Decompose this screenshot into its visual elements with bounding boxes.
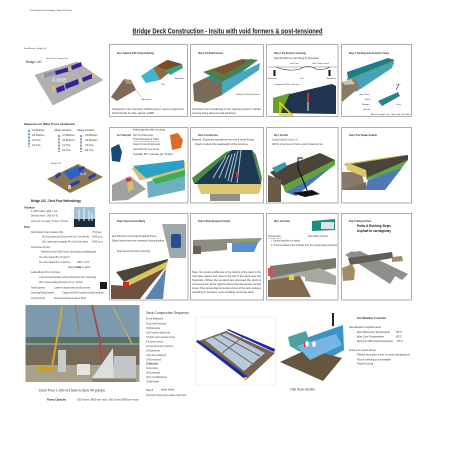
- panel: deck construction sequence: 12) Push on stressing strand: [146, 358, 161, 362]
- panel: sequence for walls pours: C2 Top: [32, 138, 41, 142]
- panel: deck construction sequence: 4) Inst soffit Formwork: [146, 322, 166, 326]
- panel: deck construction sequence: 17) Strike Falsework: [146, 380, 159, 384]
- panel: hot weather concrete: Placed via a pipe in line to control temperature: [357, 352, 410, 356]
- panel: step 2: concrete during placement and hardening.: [192, 112, 236, 115]
- panel: step 2: Step 2. Fix Reinforcement: [198, 52, 223, 55]
- panel: methodology text: Secondary: [68, 265, 82, 269]
- panel: step 4: Cone: [396, 104, 402, 106]
- panel: step 5: Step 5. Fit Bearing Sheet: [117, 134, 131, 137]
- panel: methodology text: 180 m 3/ h: [77, 260, 90, 264]
- caption: pump capacity: [47, 398, 139, 402]
- panel: step 12: Paths & Rubbing Strips: [357, 224, 391, 228]
- panel: deck construction sequence: [146, 311, 189, 397]
- panel: deck construction sequence: 6) Inst Formwork for Cantilever Slab: [146, 330, 170, 334]
- panel: methodology text: 1.200 total = 400 + A1: [31, 209, 58, 213]
- panel: sequence for walls pours: [24, 122, 98, 152]
- panel: methodology text: Other 4 crew cut crashing zone area in 3.2 m 1 - 2.5 hours: [39, 280, 83, 284]
- panel: sequence for walls pours: C4 Top: [62, 143, 71, 147]
- panel: step 9: [110, 214, 188, 300]
- panel: hot weather concrete: Pour in evening or low weather: [357, 358, 391, 362]
- panel: step 9: jack 300 tonne multi-strand hydraulic Pump.: [111, 235, 157, 238]
- panel: step 7: 400 m3 of concrete in 8 hours, pump 8 loads an hour: [272, 143, 323, 146]
- panel: hot weather concrete: Maximum differential temperature: [357, 339, 393, 343]
- panel: methodology text: Volume (m3) / hour (rate) = 3.5 hours = 5 hr slots: [31, 219, 68, 223]
- panel: deck construction sequence: 8) Fix ducts for stressing: [146, 340, 163, 344]
- panel: hot weather concrete: 30°C: [396, 330, 402, 334]
- panel: step 8: [342, 128, 412, 203]
- panel: sequence for walls pours: Sequence for Walls Pours Abutments: [24, 122, 75, 126]
- panel: methodology text: 9:00 a.m.: [92, 234, 103, 238]
- caption: deck pour: Deck Pour 1,400 m3 5am to 9pm 4# pumps: [39, 388, 105, 392]
- panel: deck construction sequence: 10) Install formers: [146, 348, 160, 352]
- panel: step 10: Step 10. Bridge Parapets & Footpath: [198, 220, 230, 223]
- panel: step 4: [342, 44, 412, 116]
- panel: step 5: Typically 55 m strands per Tendon: [133, 153, 174, 156]
- panel: step 5: [110, 128, 188, 203]
- panel: step 1: [110, 44, 188, 116]
- panel: methodology text: Supply 48 m 3 in 24 hours: [39, 270, 60, 274]
- panel: step 12: Asphalt to carriageway: [357, 229, 391, 233]
- panel: methodology text: 1No 2 boom pump capacity 40 m 3 per hour crane: [42, 240, 88, 244]
- panel: sequence for walls pours: Adapt shutters: [54, 128, 72, 132]
- panel: step 11: Step 11. Grout Tendons: [274, 220, 290, 223]
- panel: sequence for walls pours: A2 Top: [32, 143, 41, 147]
- caption: trial deck section: Trial Deck Section: [290, 388, 315, 392]
- panel: step 7: Concrete a deck 32 m boom x 3 A: [272, 138, 298, 142]
- panel: step 11: Grouting provides :-: [268, 234, 282, 238]
- panel: step 11: 1. Corrosion protection to the strands: [271, 240, 301, 242]
- panel: methodology text: One 4 boom capacity 80 m 3 to start hour: [39, 260, 70, 264]
- panel: sequence for walls pours: C4 Bottom: [62, 133, 75, 137]
- panel: step 6: [190, 128, 264, 203]
- panel: step 3: Longitudinal Deck Section: [274, 83, 300, 86]
- panel: deck construction sequence: 3) Inst Falsework: [146, 316, 164, 320]
- panel: deck construction sequence: Day 8: [146, 388, 154, 392]
- panel: bridge 14C overview diagram: A BBB: [52, 78, 67, 84]
- panel: step 9: Strand extensions are measured during loading: [112, 240, 165, 242]
- panel: methodology text: Secure any hand-site or spray at 400 ml: [54, 296, 86, 300]
- panel: step 4: Duct: [396, 83, 401, 86]
- panel: deck construction sequence: Deck Construction Sequence: [146, 311, 189, 315]
- panel: sequence for walls pours: A2 Bottom: [32, 133, 45, 137]
- panel: step 4: Wedges: [362, 104, 370, 106]
- photo: concrete pumps on site: [26, 305, 140, 382]
- panel: methodology text: 1 Quality control Team 2 supervision, all quality testing team: [62, 290, 104, 294]
- panel: methodology text: Concrete Pump:: [31, 245, 51, 249]
- panel: hot weather concrete: Max Placement Temperature: [357, 330, 390, 334]
- panel: methodology text: Labour:: [31, 270, 40, 274]
- panel: step 3: Abutment: [327, 77, 336, 80]
- panel: step 1: formwork to the deck soffit: [112, 112, 155, 115]
- panel: trial deck section illustration: [280, 313, 344, 381]
- caption: pump capacity: Pump Capacity: [47, 398, 66, 402]
- panel: step 6: Material : Expanded polystyrene formers & metal fixings: [192, 138, 255, 142]
- panel: step 4: Strands: [363, 108, 370, 111]
- panel: step 8: Step 8. Pour Parapet Upstands: [349, 134, 378, 137]
- panel: methodology text: 1No 4 boom placing unit (32 m pump with 45 m) 7 hour shift wide: [42, 234, 89, 238]
- panel: deck construction sequence: 14) Grout tendons: [146, 366, 158, 370]
- panel: methodology text: [24, 206, 104, 300]
- panel: deck construction sequence: 11) Pour deck to underside slab: [146, 353, 166, 357]
- panel: bridge 14C overview diagram: Road Name - Bridge 14C: [24, 47, 47, 50]
- panel: hot weather concrete: Specification requirements: [349, 325, 382, 329]
- panel: step 10: Note: the tendon profile lies in the bottom of the deck in the: [192, 271, 262, 274]
- panel: step 1: Falsework in the temporary scaffold system used to support the: [112, 108, 185, 111]
- panel: step 9: Span camber lift during stressing: [117, 250, 151, 253]
- header note: 1 Outline Bridge Deck Methodology - Bridge 14C Example: [29, 9, 73, 12]
- panel: methodology text: Pour: [24, 225, 30, 229]
- panel: step 3: Duct Profile curved: [312, 62, 329, 65]
- panel: step 10: mid-span region and rises to the top of the deck over the: [192, 275, 262, 278]
- panel: step 10: Supports. When the tendons are stressed the deck is: [192, 279, 262, 282]
- panel: step 5: Step 5. Pour & Bearing Sheet: [133, 134, 153, 137]
- panel: step 3: Step 3. Fix Ducts for stressing: [274, 52, 307, 55]
- panel: sequence for walls pours: A4 Top: [62, 148, 71, 152]
- panel: step 3: Void Tube: [290, 63, 300, 65]
- panel: sequence for walls pours: C6 Top: [85, 143, 94, 147]
- panel: deck construction sequence: Grout Inlet, Deck pumps, parapet, Seal, Deck: [146, 393, 186, 397]
- panel: deck plan illustration: [196, 317, 276, 385]
- panel: methodology text: 60 in work: [78, 265, 91, 269]
- panel: methodology text: Volumes: [24, 206, 36, 210]
- panel: step 2: Formwork ties bracketing to the casting used for curtain: [192, 108, 262, 111]
- panel: sequence for walls pours: A6 Top: [85, 148, 94, 152]
- panel: step 9: Step 9. Stress and Grout Sliding: [117, 220, 145, 223]
- panel: step 7: [266, 128, 338, 203]
- panel: step 12: [342, 214, 412, 300]
- panel: bridge 14C overview diagram: Deck Pour Sequence: [46, 57, 69, 60]
- panel: methodology text: 9:00 a.m.: [92, 240, 103, 244]
- panel: sequence for walls pours: C2 Bottom: [32, 128, 45, 132]
- panel: deck construction sequence: 15) Pour parapet walls: [146, 370, 160, 374]
- photo: tower crane small: [74, 207, 95, 227]
- panel: hot weather concrete: Actions to ensure above: [349, 348, 376, 352]
- panel: step 7: Step 7. Pour Deck: [274, 134, 289, 137]
- panel: step 10: compressed in those regions where the load causes tensile: [192, 283, 262, 286]
- panel: hot weather concrete: Hot Weather Concrete: [357, 316, 386, 320]
- panel: step 10: cracking to produce more durable concrete deck: [192, 291, 255, 294]
- panel: hot weather concrete: Max Core Temperature: [357, 334, 384, 338]
- panel: deck construction sequence: 13) Stress deck: [146, 362, 158, 366]
- panel: step 11: 2. A bond between the strands and the surrounding concrete: [271, 244, 338, 247]
- panel: step 6: Used to reduce the deadweight of the structure: [195, 143, 249, 146]
- panel: methodology text: Formwork Supervisor: [31, 286, 45, 290]
- panel: bridge 14C overview diagram: [24, 47, 103, 105]
- panel: bridge 14C overview diagram: Bridge 14C: [26, 60, 43, 64]
- panel: deck construction sequence: 5) Fit Bridge bearings: [146, 326, 160, 330]
- panel: sequence for walls pours: C6 Bottom: [85, 133, 98, 137]
- panel: deck construction sequence: Winter Works: [161, 388, 175, 392]
- panel: deck construction sequence: 16) Pour curved Walkway Panels: [146, 375, 167, 379]
- panel: methodology text: Working Pattern (2 day consistently 18m): [31, 230, 63, 234]
- panel: abutment site diagram: Bridge 14C: [51, 162, 62, 165]
- panel: methodology text: Placement by 4 boom 180 m3 hourly - all-over placing pre-hydrating gate: [41, 250, 96, 254]
- panel: step 6: Step 6. Fix void formers: [198, 134, 219, 137]
- panel: step 1: Step 1. Falsework, Soffit Formwork & Bearings: [117, 52, 155, 55]
- panel: methodology text: 1 crane work crew ambulating concrete at Substructure point - start working: [39, 275, 96, 279]
- panel: step 5: Speed 40 to 60 m per minute: [133, 148, 160, 151]
- panel: step 5: Strand 15.2 mm dia high tensile: [133, 143, 161, 146]
- caption: pump capacity: 160 hours 5800 per hour 160 hours 8800 per hour: [77, 398, 139, 402]
- panel: methodology text: Deck slab Volume : 1,400 m3 = 3d: [31, 214, 58, 218]
- heading: deck pour methodology: Bridge 14C - Deck Pour Methodology: [31, 199, 81, 203]
- panel: step 5: Methodology deco-after-Concreting: [133, 128, 165, 132]
- panel: step 3: Specified 80 mm dia tubing fit and space: [274, 57, 320, 60]
- panel: hot weather concrete: Proper Curing: [357, 362, 373, 366]
- panel: deck construction sequence: 9) Fix stop-ends and anchor for stressing: [146, 344, 173, 348]
- panel: step 1: Abutment: [142, 98, 152, 101]
- panel: step 1: Pier: [161, 83, 165, 86]
- panel: abutment site diagram: [47, 162, 103, 193]
- panel: step 1: Abutment: [175, 77, 185, 80]
- panel: methodology text: 1 carpenter at stage-front keep and safety crew lines: [54, 286, 90, 290]
- panel: step 11: [266, 214, 338, 300]
- panel: methodology text: One 4 boom capacity 180 m 3 to start hour: [39, 255, 70, 259]
- panel: step 11: Grout Mixer & Pump: [308, 235, 329, 238]
- panel: step 2: [190, 44, 264, 116]
- panel: hot weather concrete: 65°C: [396, 334, 402, 338]
- panel: methodology text: 7:00 am: [92, 230, 102, 234]
- panel: abutment site diagram: A B: [80, 171, 87, 176]
- panel: methodology text: Concreting Testing Engineer: [31, 290, 54, 294]
- panel: step 10: [190, 214, 264, 300]
- panel: step 3: [266, 44, 338, 116]
- panel: step 10: stress. Post-tensioning the tendon zones of the deck reduces: [192, 287, 262, 290]
- panel: step 2: Walkway & Working Platform: [236, 93, 260, 96]
- panel: step 4: Step 4. Fix Stop-ends & Anchor Zones: [349, 52, 390, 55]
- panel: deck construction sequence: 7) Fix Bottom mats of reinforcement & cages: [146, 335, 175, 339]
- panel: methodology text: Curing Supervisor: [31, 296, 45, 300]
- panel: step 5: Strand Dispenser & Traller: [133, 137, 159, 141]
- panel: step 3: Pier: [300, 77, 304, 80]
- title: Bridge Deck Construction - Insitu with void formers & post-tensioned: [132, 26, 322, 36]
- panel: step 12: Step 12. Waterproof Deck: [349, 220, 372, 223]
- panel: hot weather concrete: [349, 316, 410, 366]
- panel: sequence for walls pours: Adapt shutters: [77, 128, 95, 132]
- panel: step 4: Block: [365, 99, 371, 101]
- panel: step 3: Abutment: [268, 77, 277, 80]
- panel: step 4: Anchorage for Strand Tendon: [371, 113, 412, 116]
- panel: sequence for walls pours: A4 Bottom: [62, 138, 75, 142]
- panel: hot weather concrete: 20°C: [397, 339, 403, 343]
- panel: sequence for walls pours: A6 Bottom: [85, 138, 98, 142]
- icon: small black pump photo: [100, 282, 107, 289]
- panel: step 4: Grout Tube: [359, 93, 370, 96]
